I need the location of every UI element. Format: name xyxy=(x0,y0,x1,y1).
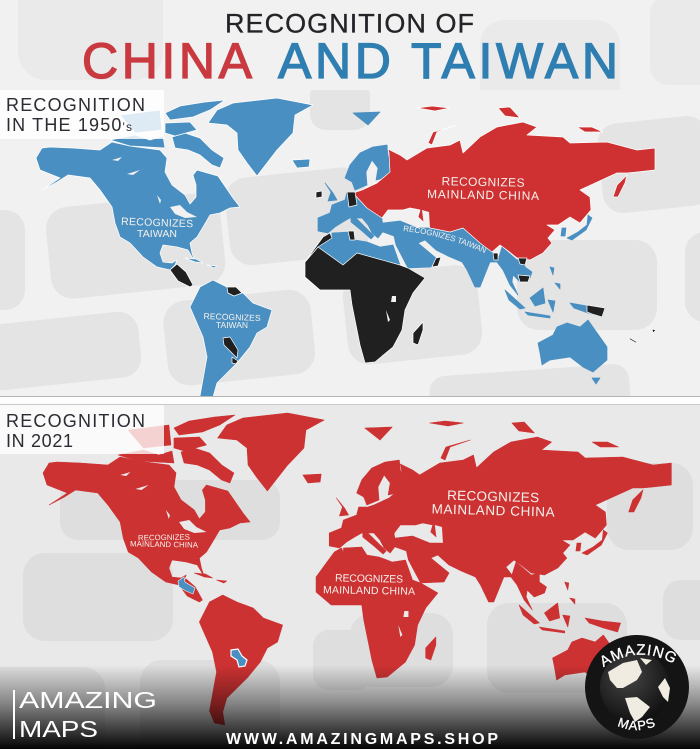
map text bottom: RECOGNIZES xyxy=(447,488,539,505)
label: recognition in 2021 xyxy=(0,405,164,454)
brand wordmark xyxy=(13,687,157,742)
map text top: MAINLAND CHINA xyxy=(427,187,539,203)
map text top: TAIWAN xyxy=(216,320,248,330)
logo globe continents xyxy=(608,658,670,722)
map text top xyxy=(121,174,539,330)
label: recognition in 2021: RECOGNITION xyxy=(6,411,145,431)
map: world 2021 xyxy=(43,413,671,725)
title: RECOGNITION OF xyxy=(225,8,474,38)
title: CHINA xyxy=(82,33,253,89)
divider between maps xyxy=(0,396,700,405)
Paraguay recognizing Taiwan xyxy=(231,649,247,667)
map text bottom: MAINLAND CHINA xyxy=(431,501,555,520)
title xyxy=(82,8,618,89)
logo badge xyxy=(585,635,689,739)
map text bottom xyxy=(130,488,555,598)
panel: recognition in the 1950s xyxy=(0,90,700,396)
map text bottom: RECOGNIZES xyxy=(335,572,403,586)
website url: WWW.AMAZINGMAPS.SHOP xyxy=(226,731,498,748)
map text top: RECOGNIZES xyxy=(121,216,193,230)
panel: recognition in 2021 xyxy=(0,405,700,749)
map: world 1950s xyxy=(36,98,656,410)
footer gradient xyxy=(0,665,700,749)
map text top: RECOGNIZES xyxy=(203,311,261,323)
label: recognition in the 1950s: RECOGNITION xyxy=(6,95,145,115)
Central America recognizing Taiwan xyxy=(178,577,195,594)
map text bottom: MAINLAND CHINA xyxy=(323,584,415,598)
label: recognition in the 1950s: IN THE 1950's xyxy=(6,115,132,135)
map backdrop top xyxy=(0,90,700,396)
map text bottom: RECOGNIZES xyxy=(138,533,190,542)
unrecognized / colonised territories in black xyxy=(170,191,656,364)
Soviet bloc and China recognizing mainland China xyxy=(353,106,655,260)
map text top: RECOGNIZES TAIWAN xyxy=(404,226,486,253)
header backdrop shapes xyxy=(18,0,700,120)
brand wordmark: AMAZING xyxy=(19,687,157,713)
title: AND TAIWAN xyxy=(278,33,618,89)
map text top: TAIWAN xyxy=(137,228,177,240)
logo badge: AMAZING xyxy=(602,644,676,668)
logo badge: MAPS xyxy=(618,718,655,730)
Europe, North Africa, Asia and Oceania recognizing Taiwan xyxy=(318,112,607,384)
label: recognition in 2021: IN 2021 xyxy=(6,431,73,451)
Americas recognizing Taiwan xyxy=(36,98,313,410)
brand wordmark: MAPS xyxy=(19,716,98,742)
map text top: RECOGNIZES xyxy=(441,174,525,190)
map text bottom: MAINLAND CHINA xyxy=(130,539,199,550)
label: recognition in the 1950s xyxy=(0,90,164,139)
